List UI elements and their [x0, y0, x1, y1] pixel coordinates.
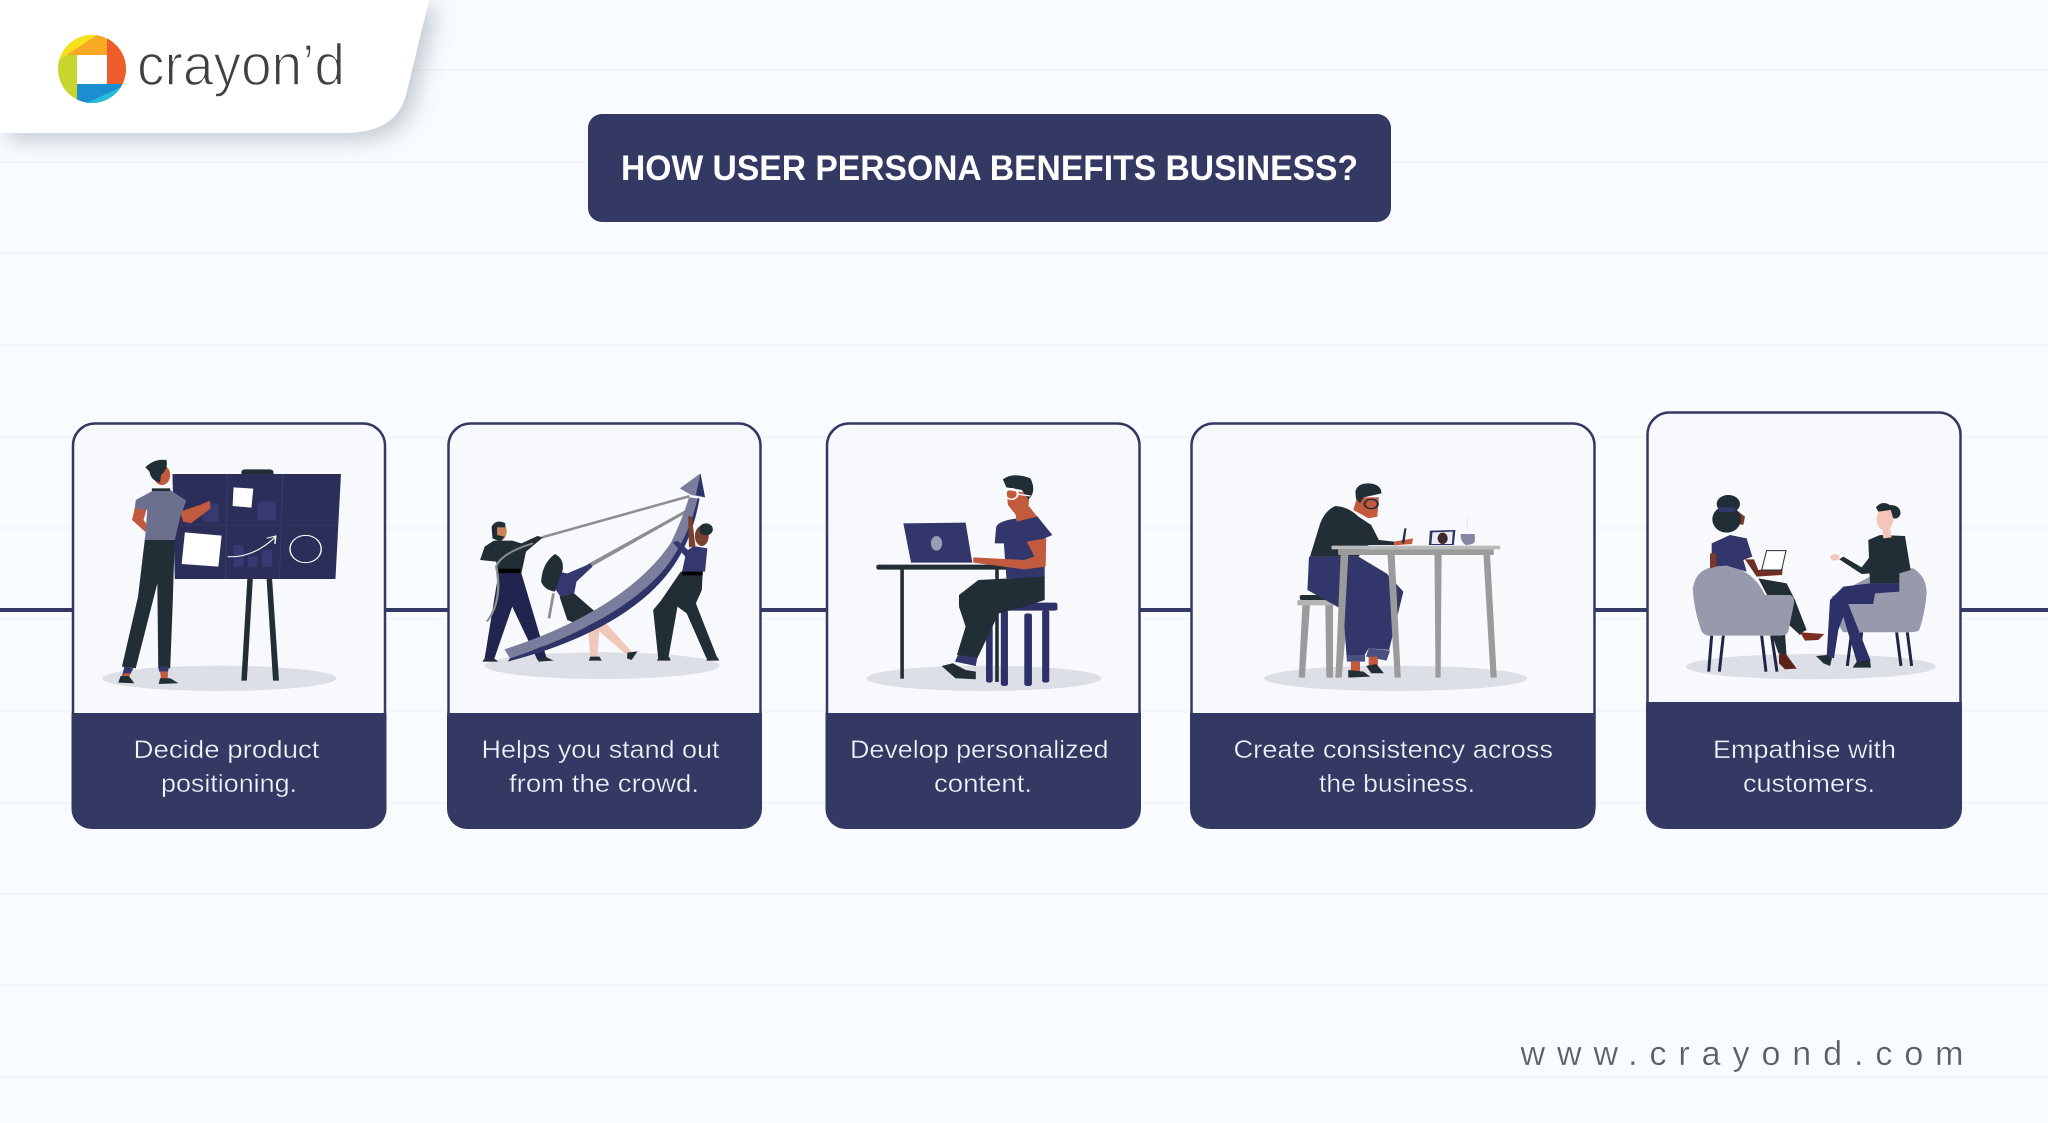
panel: empathise with customers: [1646, 412, 1962, 829]
caption: Helps you stand out: [482, 736, 720, 764]
caption: Empathise with: [1713, 736, 1896, 764]
panel: create consistency: [1190, 424, 1596, 829]
caption: Create consistency across: [1234, 736, 1553, 764]
website url: www.crayond.com: [1520, 1035, 1964, 1073]
illustration: person with laptop at desk: [867, 475, 1101, 691]
caption: [1713, 736, 1896, 798]
caption: customers.: [1743, 770, 1875, 798]
caption: [850, 736, 1108, 798]
logo panel: [0, 0, 429, 133]
panel: develop personalized content: [826, 424, 1141, 829]
illustration: two people in armchairs: [1686, 495, 1936, 679]
caption: positioning.: [161, 770, 297, 798]
illustration: team pulling growth arrow: [480, 473, 720, 679]
caption: the business.: [1319, 770, 1475, 798]
caption: from the crowd.: [509, 770, 699, 798]
caption: content.: [934, 770, 1032, 798]
caption: [134, 736, 320, 798]
illustration: person at planning board: [102, 460, 341, 691]
icon: crayon'd logo mark: [58, 35, 126, 103]
panel: stand out from the crowd: [447, 424, 762, 829]
caption: [482, 736, 720, 798]
title banner: HOW USER PERSONA BENEFITS BUSINESS?: [621, 149, 1358, 188]
panel: decide product positioning: [72, 424, 386, 829]
caption: [1234, 736, 1553, 798]
connector line: [0, 608, 2048, 612]
title banner: [588, 114, 1391, 222]
caption: Develop personalized: [850, 736, 1108, 764]
illustration: person writing at table: [1264, 483, 1527, 691]
logo wordmark: crayon’d: [137, 33, 345, 98]
caption: Decide product: [134, 736, 320, 764]
